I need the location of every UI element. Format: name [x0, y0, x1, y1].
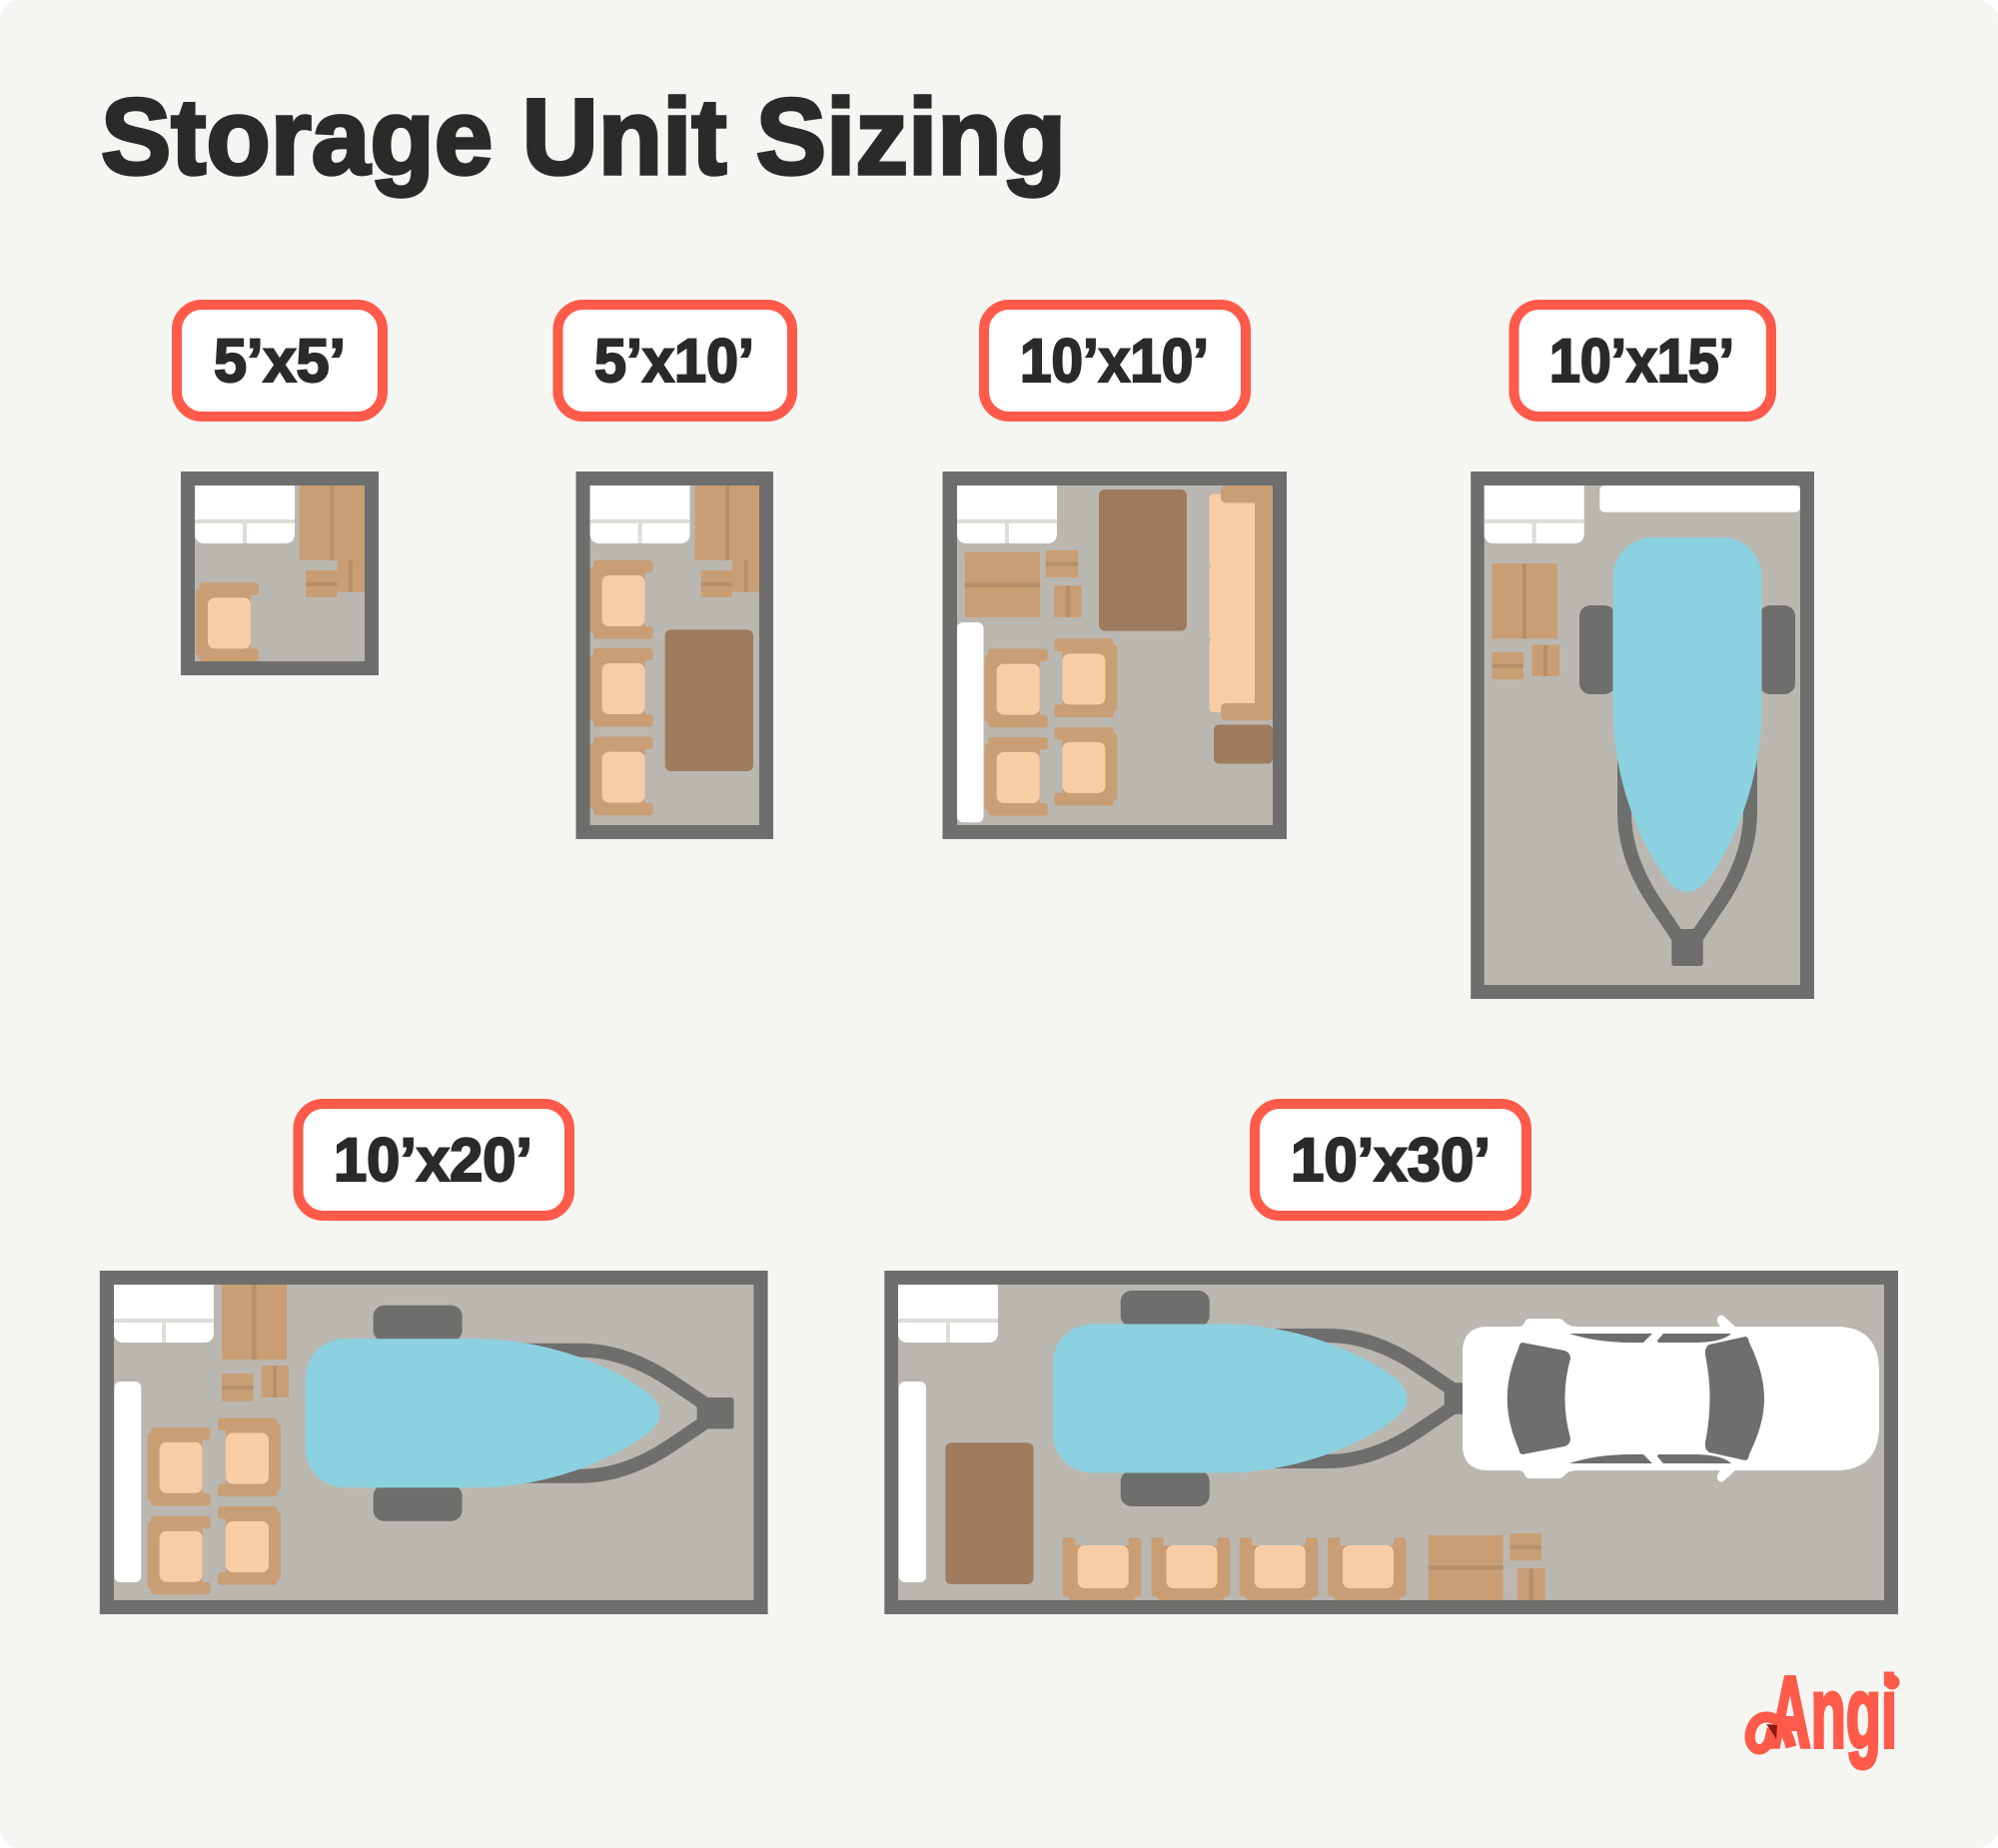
- size label: 10x20: [298, 1104, 569, 1216]
- car: [1463, 1315, 1879, 1482]
- logo: Angi: Angi: [1769, 1657, 1897, 1769]
- panel: 10x30 unit: [884, 1271, 1898, 1614]
- panel: 10x15 unit: [1471, 471, 1814, 999]
- size label: 10x30: 10’x30’: [1291, 1126, 1491, 1194]
- logo: Angi: [1750, 1657, 1900, 1769]
- size label: 5x5: 5’x5’: [214, 327, 346, 395]
- size label: 10x10: 10’x10’: [1020, 327, 1209, 395]
- size label: 10x30: [1255, 1104, 1526, 1216]
- size label: 5x10: [557, 305, 792, 417]
- size label: 5x5: [177, 305, 383, 417]
- size label: 10x15: 10’x15’: [1549, 327, 1734, 395]
- size label: 10x15: [1514, 305, 1771, 417]
- panel: 5x10 unit: [575, 471, 773, 839]
- panel: 10x10 unit: [943, 471, 1287, 839]
- panel: 5x5 unit: [181, 471, 379, 675]
- size label: 5x10: 5’x10’: [594, 327, 754, 395]
- size label: 10x10: [984, 305, 1246, 417]
- size label: 10x20: 10’x20’: [334, 1126, 532, 1194]
- panel: 10x20 unit: [100, 1271, 768, 1614]
- title: Storage Unit Sizing: [101, 76, 1066, 197]
